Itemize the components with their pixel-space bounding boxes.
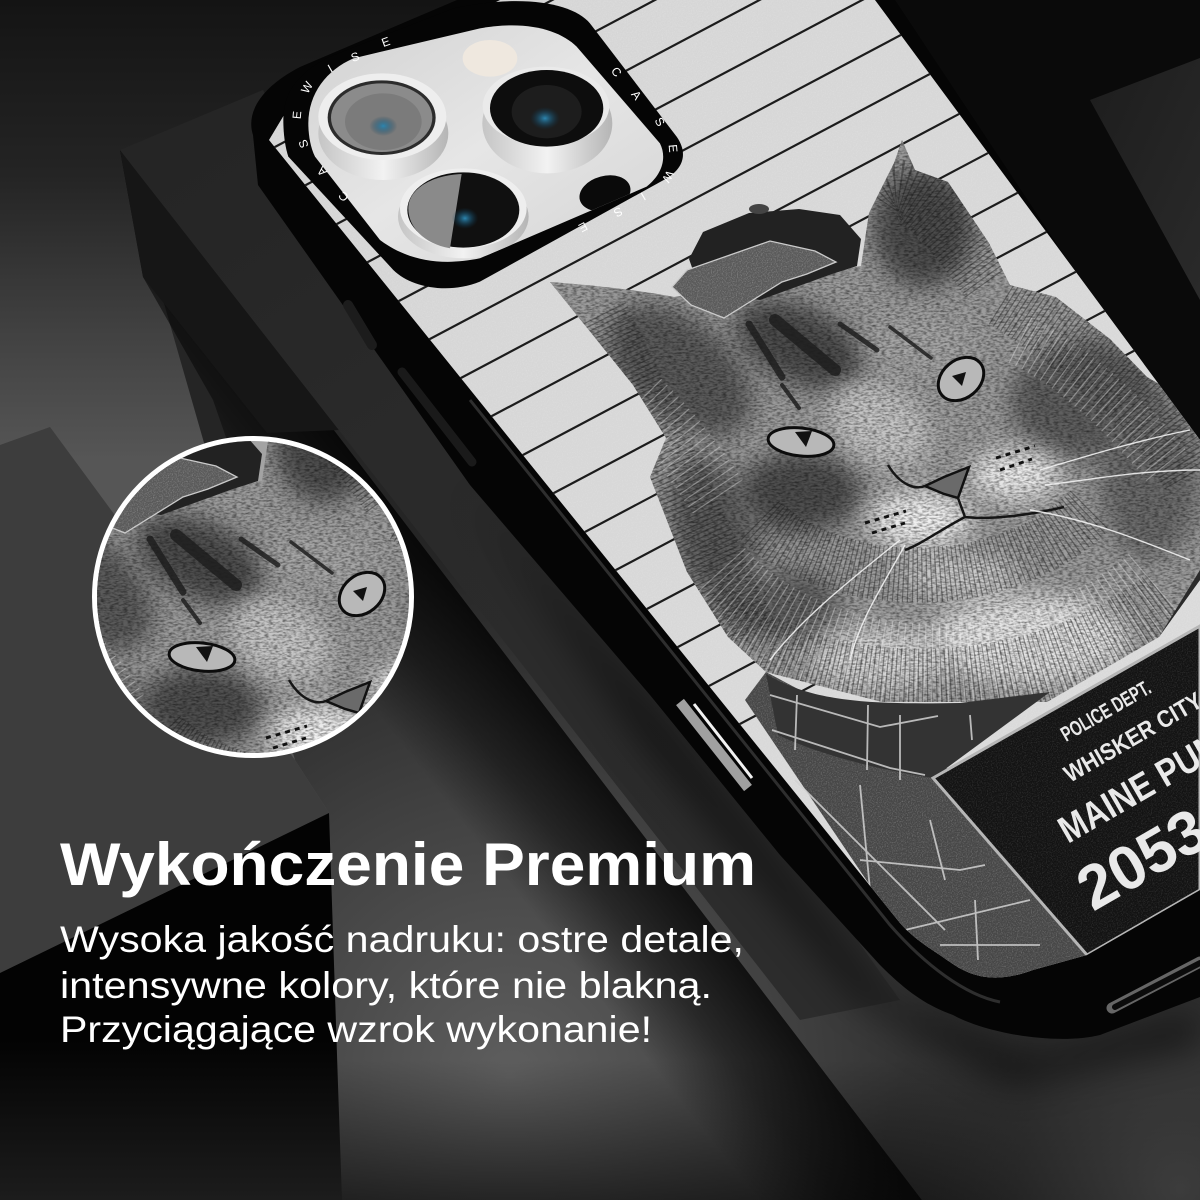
black block shadow	[0, 813, 342, 1200]
CASEWISE ring lettering: W	[659, 168, 677, 185]
description text: Przyciągające wzrok wykonanie!	[60, 1009, 652, 1050]
lens: upper right	[482, 67, 612, 173]
CASEWISE ring lettering: A	[314, 164, 330, 179]
CASEWISE ring lettering: E	[380, 34, 392, 50]
CASEWISE ring lettering: C	[335, 188, 352, 204]
CASEWISE ring lettering: S	[349, 49, 361, 65]
phone shadow	[470, 490, 1200, 1085]
plate text	[1056, 680, 1200, 911]
plate text: POLICE DEPT.	[1057, 676, 1155, 746]
lens: upper left	[318, 73, 448, 180]
mugshot plate	[933, 626, 1200, 955]
rim highlight	[680, 702, 748, 788]
printed back panel	[269, 0, 1200, 978]
glass window	[308, 25, 663, 262]
rim gloss	[470, 400, 1000, 1002]
CASEWISE ring lettering: S	[652, 115, 668, 129]
top right block	[875, 0, 1200, 440]
sweater	[745, 672, 1100, 1000]
camera island	[283, 1, 683, 288]
large block top face	[120, 90, 900, 1020]
stripes	[274, 0, 1193, 725]
description text: intensywne kolory, które nie blakną.	[60, 965, 712, 1006]
left block top face	[0, 427, 329, 973]
side button upper	[348, 305, 372, 345]
CASEWISE ring lettering: C	[608, 64, 625, 80]
heading: Wykończenie Premium	[60, 831, 756, 898]
magnified detail circle	[92, 436, 414, 758]
flash	[463, 40, 517, 77]
CASEWISE ring lettering: I	[638, 189, 648, 203]
description text	[60, 919, 744, 1050]
description text: Wysoka jakość nadruku: ostre detale,	[60, 919, 744, 960]
CASEWISE ring lettering: I	[325, 62, 335, 76]
cat illustration	[540, 130, 1200, 720]
CASEWISE ring lettering: E	[290, 110, 304, 120]
phone body	[251, 0, 1200, 1039]
side button lower	[402, 372, 472, 462]
microphone	[579, 175, 630, 210]
large block side face	[120, 150, 960, 1200]
CASEWISE ring lettering: E	[666, 144, 680, 153]
CASEWISE ring lettering: A	[628, 88, 644, 103]
CASEWISE ring lettering: W	[298, 78, 316, 96]
CASEWISE ring lettering: E	[576, 219, 590, 235]
lens: lower	[398, 168, 529, 258]
collar	[766, 674, 1050, 778]
CASEWISE ring lettering: S	[611, 204, 625, 220]
CASEWISE ring lettering	[290, 34, 680, 235]
charging port	[1112, 962, 1200, 1008]
CASEWISE ring lettering: S	[296, 138, 312, 150]
